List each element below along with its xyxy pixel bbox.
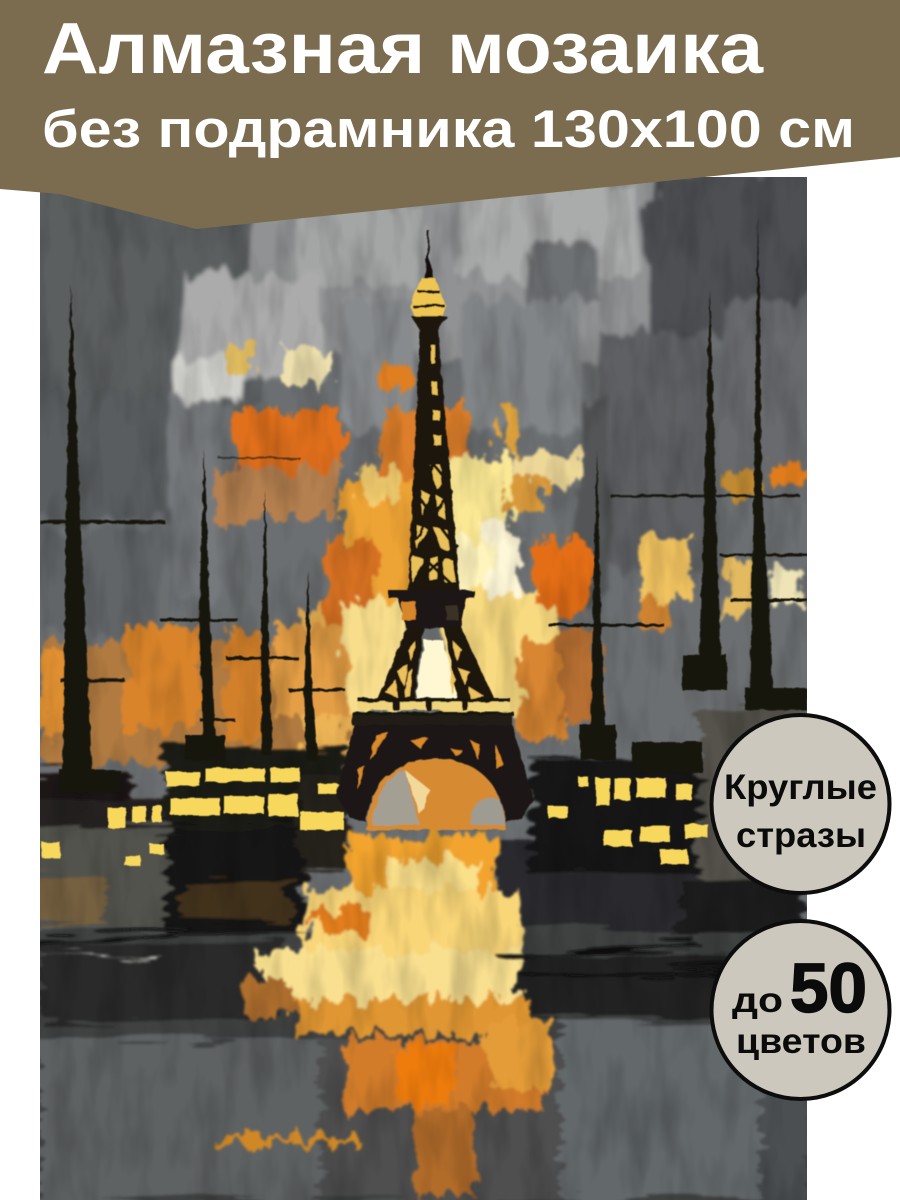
badge: up to 50 colours: 50	[790, 949, 867, 1027]
tower spire and cap	[410, 230, 447, 330]
badge: round rhinestones	[712, 715, 890, 893]
title: Алмазная мозаика	[42, 9, 764, 89]
painting: Eiffel Tower and ships	[20, 170, 820, 1200]
badge: up to 50 colours	[712, 921, 890, 1099]
badge: up to 50 colours: до	[732, 981, 783, 1020]
tower first level platform	[352, 700, 514, 725]
ship silhouettes and hulls	[30, 710, 807, 955]
subtitle: без подрамника 130х100 см	[42, 100, 855, 159]
light under second level	[415, 640, 458, 702]
waterline dark strokes	[40, 932, 800, 975]
tower base arch	[336, 725, 534, 822]
warm glow brushwork	[40, 345, 805, 765]
badge: round rhinestones: Круглые	[724, 768, 877, 807]
header banner	[0, 0, 900, 229]
Eiffel Tower	[336, 230, 534, 822]
water and reflections	[30, 930, 820, 1200]
tower arch glow	[366, 640, 506, 830]
masts and yards	[40, 215, 807, 792]
badge: round rhinestones: стразы	[736, 816, 866, 855]
tower upper shaft	[408, 328, 460, 592]
badge: up to 50 colours: цветов	[736, 1022, 866, 1061]
sky brushwork	[20, 170, 820, 630]
tower second level platform	[388, 590, 474, 628]
lit ship windows	[42, 768, 708, 866]
tower legs between levels	[376, 625, 496, 702]
brush streak texture	[40, 177, 807, 1200]
